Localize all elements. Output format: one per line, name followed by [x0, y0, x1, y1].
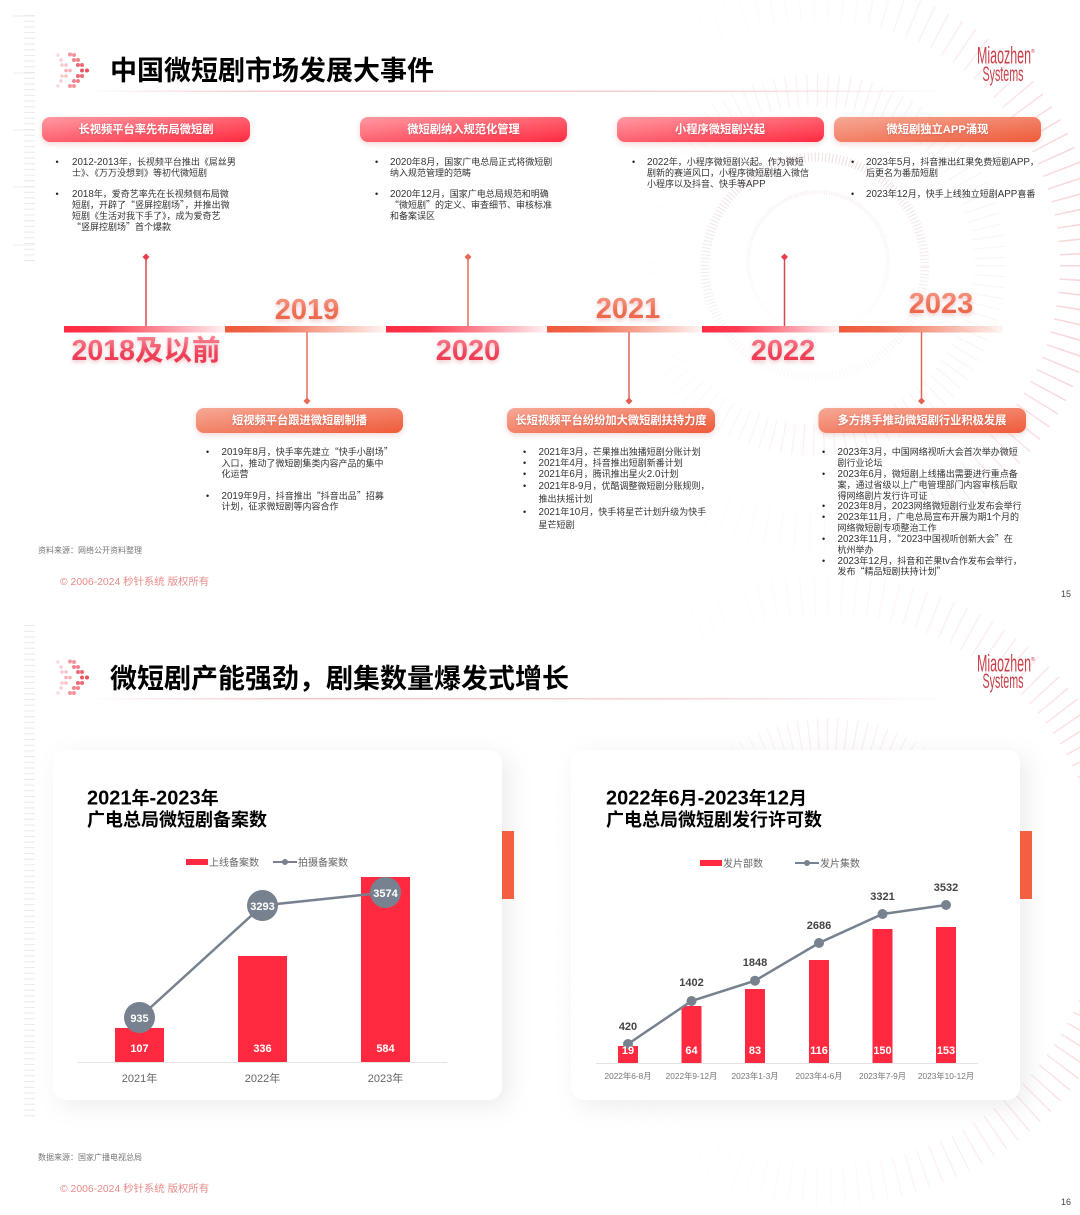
bullet list: 士》、《万万没想到》等初代微短剧	[72, 167, 207, 178]
copyright: © 2006-2024 秒针系统 版权所有	[60, 1182, 209, 1195]
bullet list: 2023年3月，中国网络视听大会首次举办微短	[838, 446, 1018, 458]
x axis labels: 2022年	[245, 1071, 280, 1085]
bullet list: 短剧《生活对我下手了》，成为爱奇艺	[72, 210, 221, 221]
bullet list	[56, 156, 236, 233]
panel: platform support	[507, 408, 715, 530]
connector: 2020	[464, 254, 472, 326]
card background	[53, 750, 502, 1100]
line value labels: 1402	[679, 977, 704, 989]
heading pill	[196, 408, 403, 433]
x axis labels	[122, 1071, 403, 1085]
bullet list: 2020年8月，国家广电总局正式将微短剧	[390, 156, 552, 168]
bullet list: •	[822, 447, 825, 457]
icon: dotted arrow	[56, 52, 89, 88]
heading pill: 长短视频平台纷纷加大微短剧扶持力度	[515, 413, 707, 427]
bullet list	[632, 156, 809, 190]
year: 2019: 2019	[275, 294, 339, 326]
bullet list: 网络微短剧专项整治工作	[838, 522, 937, 533]
year: 2020: 2020	[436, 335, 500, 367]
line series	[623, 900, 951, 1049]
line series: 935	[130, 1013, 149, 1025]
bullet list: “竖屏控剧场”首个爆款	[72, 220, 171, 233]
page number: 16	[1061, 1197, 1071, 1207]
bullet list: 2020年12月，国家广电总局规范和明确	[390, 188, 549, 200]
bar chart: 107	[130, 1043, 149, 1055]
logo: Systems	[982, 670, 1024, 693]
bullet list: •	[851, 189, 854, 199]
line series: 3293	[250, 901, 275, 913]
bullet list: •	[523, 507, 526, 517]
year: 2023: 2023	[909, 288, 973, 320]
copyright: © 2006-2024 秒针系统 版权所有	[60, 575, 209, 588]
timeline bar	[64, 326, 1003, 332]
bullet list: 案，通过省级以上广电管理部门内容审核后取	[838, 479, 1018, 490]
x axis labels: 2022年6-8月	[604, 1071, 652, 1081]
card background	[571, 750, 1020, 1100]
bullet list: 2019年8月，快手率先建立“快手小剧场”	[222, 445, 393, 458]
side tab	[502, 831, 514, 899]
legend: 发片集数	[820, 857, 860, 870]
bullet list: •	[822, 469, 825, 479]
title: 中国微短剧市场发展大事件	[110, 56, 434, 86]
heading pill: 长视频平台率先布局微短剧	[78, 122, 214, 136]
background tick rings	[13, 0, 1080, 530]
legend	[700, 857, 860, 870]
bullet list	[206, 445, 393, 512]
heading pill	[507, 408, 715, 433]
panel: filing counts chart	[53, 750, 514, 1100]
heading pill	[834, 117, 1041, 142]
heading pill: 微短剧纳入规范化管理	[407, 122, 520, 136]
line value labels: 3321	[870, 891, 895, 903]
logo: Miaozhen	[977, 650, 1031, 678]
bullet list: 剧新的赛道风口，小程序微短剧植入微信	[647, 167, 809, 178]
bullet list: 2021年8-9月，优酷调整微短剧分账规则，	[538, 480, 710, 492]
bullet list: •	[851, 157, 854, 167]
heading pill: 小程序微短剧兴起	[675, 122, 766, 136]
line series	[124, 877, 401, 1033]
slide 15: market events timeline	[13, 0, 1080, 599]
heading pill	[360, 117, 567, 142]
line value labels: 1848	[743, 957, 767, 969]
legend: 拍摄备案数	[298, 856, 348, 869]
bullet list: •	[523, 458, 526, 468]
bullet list: •	[523, 447, 526, 457]
panel: standalone apps	[834, 117, 1041, 200]
bullet list: 2023年12月，抖音和芒果tv合作发布会举行，	[838, 555, 1022, 567]
bullet list: •	[375, 157, 378, 167]
bullet list: 2022年，小程序微短剧兴起。作为微短	[647, 156, 804, 168]
bullet list: •	[632, 157, 635, 167]
heading pill: 多方携手推动微短剧行业积极发展	[838, 413, 1006, 427]
bullet list: 计划，征求微短剧等内容合作	[222, 500, 339, 512]
bullet list: •	[56, 157, 59, 167]
side tab	[1020, 831, 1032, 899]
bullet list: 和备案误区	[390, 210, 435, 221]
bullet list: 2021年10月，快手将星芒计划升级为快手	[538, 506, 706, 518]
bullet list: “微短剧”的定义、审查细节、审核标准	[390, 198, 552, 211]
bullet list: 2019年9月，抖音推出“抖音出品”招募	[222, 489, 384, 502]
bullet list: 2023年8月，2023网络微短剧行业发布会举行	[838, 500, 1022, 512]
bar value labels: 150	[873, 1045, 892, 1057]
chart title: 2021年-2023年	[87, 788, 219, 810]
x axis labels: 2023年1-3月	[731, 1071, 779, 1081]
icon: dotted arrow	[56, 660, 89, 695]
line value labels: 3532	[934, 882, 958, 894]
connector: 2021	[626, 332, 632, 404]
bullet list: 杭州举办	[838, 544, 874, 555]
bullet list: 短剧，开辟了“竖屏控剧场”，并推出微	[72, 198, 230, 211]
chart title: 广电总局微短剧备案数	[87, 809, 267, 830]
bullet list: 2023年5月，抖音推出红果免费短剧APP，	[866, 156, 1039, 168]
x axis labels	[604, 1071, 974, 1081]
legend: 上线备案数	[209, 856, 259, 869]
legend	[186, 856, 348, 869]
bullet list: •	[822, 556, 825, 566]
title: 微短剧产能强劲，剧集数量爆发式增长	[110, 664, 569, 694]
bar value labels: 153	[937, 1045, 955, 1057]
logo: ®	[1031, 656, 1035, 663]
title underline	[88, 90, 958, 92]
bullet list: 星芒短剧	[538, 519, 575, 530]
x axis labels: 2023年4-6月	[795, 1071, 843, 1081]
x axis labels: 2022年9-12月	[666, 1071, 717, 1081]
connector: 2018	[142, 254, 150, 326]
bullet list: •	[822, 534, 825, 544]
bullet list: 小程序以及抖音、快手等APP	[647, 178, 766, 190]
bar chart	[596, 927, 978, 1064]
heading pill	[42, 117, 250, 142]
panel: mini programs	[617, 117, 824, 190]
x axis labels: 2023年	[368, 1071, 403, 1085]
line series: 3574	[373, 888, 399, 900]
source note: 数据来源：国家广播电视总局	[38, 1152, 142, 1162]
bullet list: 剧行业论坛	[838, 457, 883, 468]
panel: distribution license chart	[571, 750, 1032, 1100]
logo: Systems	[982, 63, 1024, 86]
bullet list: 入口，推动了微短剧集类内容产品的集中	[222, 458, 384, 468]
bullet list: 得网络剧片发行许可证	[838, 490, 928, 501]
line value labels	[619, 882, 958, 1033]
line value labels: 2686	[807, 920, 831, 932]
bar value labels	[622, 1045, 955, 1057]
bar chart: 584	[376, 1043, 396, 1055]
bullet list: 化运营	[222, 468, 249, 479]
bar value labels: 83	[749, 1045, 761, 1057]
bar chart: 336	[253, 1043, 272, 1055]
background tick rings	[30, 595, 1080, 1185]
bullet list: 发布“精品短剧扶持计划”	[838, 564, 946, 578]
logo: ®	[1031, 48, 1035, 55]
chart title	[606, 788, 822, 830]
bullet list: 2023年11月，广电总局宣布开展为期1个月的	[838, 511, 1019, 523]
chart title: 广电总局微短剧发行许可数	[606, 809, 822, 830]
panel: multi-party promotion	[818, 408, 1026, 578]
logo	[977, 42, 1035, 86]
bullet list	[851, 156, 1039, 200]
chart title	[87, 788, 267, 830]
panel: long video platforms	[42, 117, 250, 233]
heading pill: 微短剧独立APP涌现	[887, 122, 988, 136]
connector: 2023	[918, 332, 925, 404]
bullet list: •	[523, 469, 526, 479]
panel: short video platforms	[196, 408, 403, 512]
bar chart	[78, 877, 447, 1062]
bullet list: 推出扶摇计划	[538, 493, 593, 504]
bullet list: 2021年3月，芒果推出独播短剧分账计划	[538, 446, 701, 458]
title underline	[88, 698, 958, 700]
bullet list	[523, 446, 710, 530]
page number: 15	[1061, 589, 1071, 599]
bullet list: •	[523, 481, 526, 491]
bullet list: •	[822, 512, 825, 522]
bullet list	[375, 156, 552, 221]
bullet list: 2021年6月，腾讯推出星火2.0计划	[538, 468, 678, 480]
bullet list: •	[206, 447, 209, 457]
bullet list: 2023年6月，微短剧上线播出需要进行重点备	[838, 468, 1018, 480]
legend: 发片部数	[723, 857, 763, 870]
bullet list: 2023年11月，“2023中国视听创新大会”在	[838, 532, 1013, 545]
bar value labels: 116	[810, 1045, 828, 1057]
line value labels: 420	[619, 1021, 637, 1033]
connector: 2019	[304, 332, 310, 404]
bullet list: 后更名为番茄短剧	[866, 167, 938, 178]
bullet list: 2012-2013年，长视频平台推出《屌丝男	[72, 156, 236, 168]
bar value labels: 19	[622, 1045, 634, 1057]
x axis labels: 2023年10-12月	[918, 1071, 974, 1081]
heading pill	[617, 117, 824, 142]
connector: 2022	[781, 254, 788, 326]
x axis labels: 2023年7-9月	[859, 1071, 906, 1081]
heading pill: 短视频平台跟进微短剧制播	[232, 413, 368, 427]
year: 2018 and before: 2018及以前	[72, 335, 220, 367]
bullet list: 2021年4月，抖音推出短剧新番计划	[538, 457, 683, 469]
slide 16: production capacity	[30, 595, 1080, 1207]
x axis labels: 2021年	[122, 1071, 157, 1085]
bar value labels: 64	[685, 1045, 698, 1057]
bullet list: •	[206, 491, 209, 501]
panel: regulation	[360, 117, 567, 221]
heading pill	[818, 408, 1026, 433]
year: 2021: 2021	[596, 293, 660, 325]
bullet list: •	[56, 189, 59, 199]
bullet list: •	[822, 501, 825, 511]
bullet list: 2023年12月，快手上线独立短剧APP喜番	[866, 188, 1035, 200]
year: 2022: 2022	[751, 335, 815, 367]
bullet list: 纳入规范管理的范畴	[390, 167, 471, 178]
logo: Miaozhen	[977, 42, 1031, 70]
logo	[977, 650, 1035, 693]
source note: 资料来源：网络公开资料整理	[38, 545, 142, 555]
bullet list	[822, 446, 1022, 578]
chart title: 2022年6月-2023年12月	[606, 788, 807, 810]
bullet list: 2018年，爱奇艺率先在长视频侧布局微	[72, 188, 229, 200]
bullet list: •	[375, 189, 378, 199]
